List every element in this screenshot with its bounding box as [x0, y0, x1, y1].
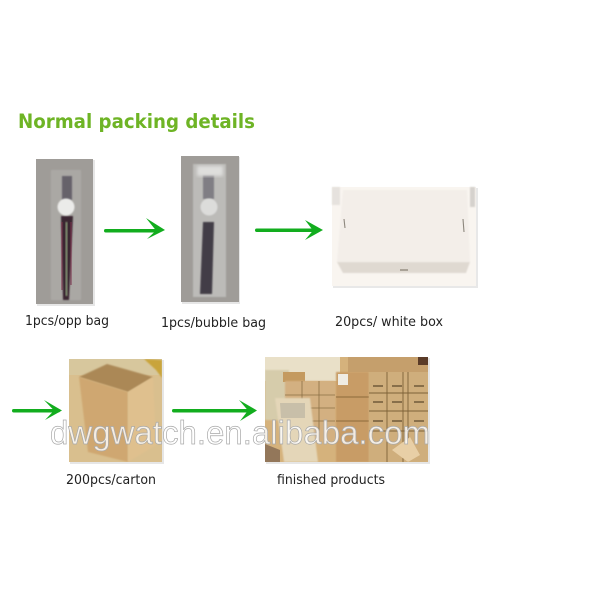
caption: white box: 20pcs/ white box: [335, 314, 443, 330]
arrow: white box to carton: [12, 400, 62, 420]
caption: carton: 200pcs/carton: [66, 472, 156, 488]
photo: watch in bubble bag: [181, 156, 240, 304]
title: Normal packing details: [18, 110, 255, 133]
arrow: carton to finished products: [172, 400, 257, 421]
photo: watch in opp bag: [36, 159, 95, 306]
photo: warehouse of finished products: [265, 357, 430, 464]
photo: white box: [332, 187, 478, 288]
arrow: bubble bag to white box: [255, 220, 323, 240]
caption: opp bag: 1pcs/opp bag: [25, 313, 109, 329]
caption: bubble bag: 1pcs/bubble bag: [161, 315, 266, 331]
arrow: opp bag to bubble bag: [104, 218, 165, 239]
watermark: dwgwatch.en.alibaba.com: [50, 414, 430, 451]
photo: cardboard carton: [69, 359, 164, 464]
caption: finished products: finished products: [277, 472, 385, 488]
